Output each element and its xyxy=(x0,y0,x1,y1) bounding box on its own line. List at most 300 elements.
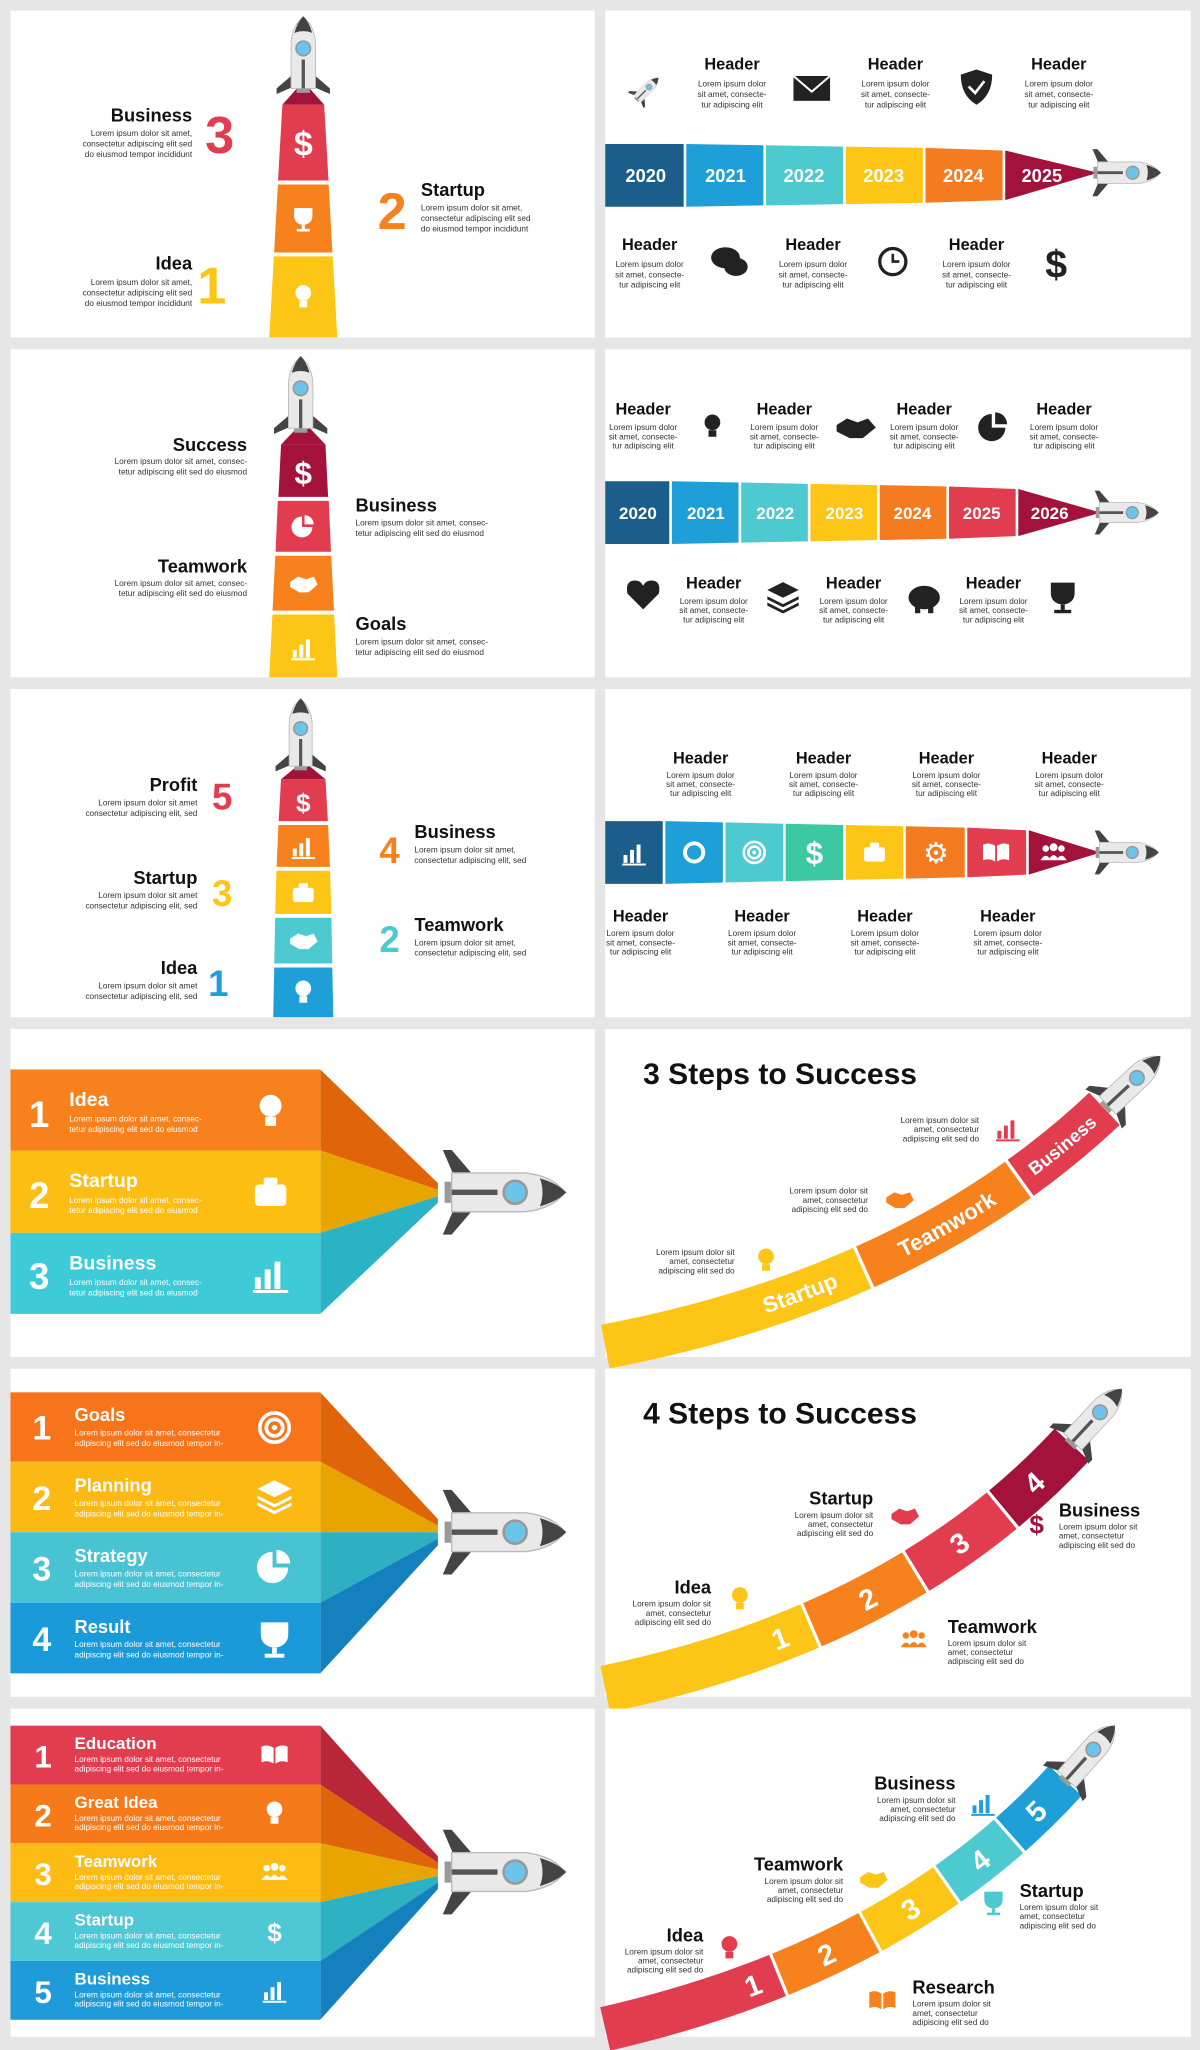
title: 3 Steps to Success xyxy=(643,1058,917,1091)
band 4 startup: adipiscing elit sed do eiusmod tempor in- xyxy=(75,1941,224,1950)
band 2 planning: adipiscing elit sed do eiusmod tempor in- xyxy=(75,1510,224,1519)
timeline bar: 2023 xyxy=(863,165,904,186)
headers: Lorem ipsum dolor xyxy=(728,929,796,938)
rocket xyxy=(1049,1371,1141,1464)
rocket bar: $ xyxy=(295,456,312,491)
callouts: Startup xyxy=(1020,1880,1084,1901)
callouts: amet, consectetur xyxy=(948,1648,1013,1657)
band 1 idea: Lorem ipsum dolor sit amet, consec- xyxy=(69,1115,202,1124)
band 2 planning: Planning xyxy=(75,1475,152,1496)
band 4 startup: Startup xyxy=(75,1911,134,1930)
text: idea: Idea xyxy=(156,252,193,273)
headers: tur adipiscing elit xyxy=(823,615,885,624)
timeline bar xyxy=(605,821,1101,884)
band 2 great idea: Great Idea xyxy=(75,1793,158,1812)
callouts: Lorem ipsum dolor sit xyxy=(656,1248,735,1257)
top headers: Header xyxy=(704,55,760,73)
band 2 startup: 2 xyxy=(29,1175,49,1216)
bottom headers: Lorem ipsum dolor xyxy=(616,260,684,269)
band 1 goals: adipiscing elit sed do eiusmod tempor in- xyxy=(75,1439,224,1448)
text: idea xyxy=(83,252,226,315)
headers: sit amet, consecte- xyxy=(679,606,748,615)
headers: Lorem ipsum dolor xyxy=(820,597,888,606)
callouts: amet, consectetur xyxy=(778,1886,843,1895)
headers: tur adipiscing elit xyxy=(683,615,745,624)
callouts: amet, consectetur xyxy=(808,1520,873,1529)
headers: Header xyxy=(757,401,813,419)
headers: Lorem ipsum dolor xyxy=(912,771,981,780)
curve xyxy=(605,1781,1065,2029)
text: startup: Startup xyxy=(421,179,485,200)
curve numbers: 2 xyxy=(818,1944,837,1967)
bottom headers: sit amet, consecte- xyxy=(615,270,684,279)
text blocks: Success xyxy=(173,434,247,455)
band 5 business: Business xyxy=(75,1969,150,1988)
fan xyxy=(320,1392,438,1673)
text blocks: Lorem ipsum dolor sit amet xyxy=(98,798,198,807)
headers: sit amet, consecte- xyxy=(973,938,1043,947)
band 5 business: adipiscing elit sed do eiusmod tempor in- xyxy=(75,2000,224,2009)
band 1 idea xyxy=(10,1069,320,1150)
headers: sit amet, consecte- xyxy=(606,938,675,947)
headers: sit amet, consecte- xyxy=(750,432,819,441)
top headers: tur adipiscing elit xyxy=(701,100,763,109)
band 4 startup xyxy=(10,1902,320,1961)
panel 9: 4 band rocket xyxy=(10,1369,595,1697)
headers: Lorem ipsum dolor xyxy=(890,423,958,432)
callouts: amet, consectetur xyxy=(669,1257,735,1266)
top headers: Lorem ipsum dolor xyxy=(861,79,930,88)
headers: Header xyxy=(686,574,742,592)
callouts: adipiscing elit sed do xyxy=(797,1529,874,1538)
timeline bar xyxy=(605,481,1101,544)
panel 3: rocket 4 stages xyxy=(10,349,595,677)
text: business xyxy=(83,105,234,165)
callouts: adipiscing elit sed do xyxy=(903,1134,980,1143)
callouts: adipiscing elit sed do xyxy=(912,2018,989,2027)
top headers: sit amet, consecte- xyxy=(861,90,930,99)
headers: Header xyxy=(613,908,669,926)
bottom headers: sit amet, consecte- xyxy=(779,270,848,279)
band 4 startup: $ xyxy=(267,1917,282,1947)
text blocks: Lorem ipsum dolor sit amet, consec- xyxy=(356,638,488,647)
curve numbers: 3 xyxy=(902,1899,920,1920)
bottom headers: Header xyxy=(949,236,1005,254)
band 3 teamwork xyxy=(10,1843,320,1902)
band 2 planning xyxy=(10,1462,320,1532)
timeline bar: 2022 xyxy=(756,504,794,523)
bottom headers: sit amet, consecte- xyxy=(942,270,1011,279)
rocket xyxy=(1092,149,1161,196)
band 2 startup: Lorem ipsum dolor sit amet, consec- xyxy=(69,1196,202,1205)
callouts: Business xyxy=(874,1773,956,1794)
headers: sit amet, consecte- xyxy=(959,606,1028,615)
callouts: Lorem ipsum dolor sit xyxy=(633,1600,712,1609)
headers: Lorem ipsum dolor xyxy=(667,771,735,780)
bottom headers: Header xyxy=(785,236,841,254)
top headers: Lorem ipsum dolor xyxy=(698,79,766,88)
curve numbers xyxy=(745,1800,1046,1997)
text blocks: 3 xyxy=(212,873,232,914)
band 3 strategy: adipiscing elit sed do eiusmod tempor in- xyxy=(75,1580,224,1589)
headers: Lorem ipsum dolor xyxy=(959,597,1028,606)
headers: Header xyxy=(673,750,729,768)
text blocks: consectetur adipiscing elit, sed xyxy=(414,856,527,865)
callouts: Lorem ipsum dolor sit xyxy=(625,1947,704,1956)
bottom headers: tur adipiscing elit xyxy=(946,281,1008,290)
text: startup: do eiusmod tempor incididunt xyxy=(421,225,529,234)
headers: tur adipiscing elit xyxy=(670,789,732,798)
headers: tur adipiscing elit xyxy=(963,615,1025,624)
timeline bar: 2025 xyxy=(1021,165,1062,186)
text blocks: Lorem ipsum dolor sit amet, consec- xyxy=(356,519,488,528)
text blocks: consectetur adipiscing elit, sed xyxy=(85,902,198,911)
text: startup: 2 xyxy=(378,183,407,241)
headers: sit amet, consecte- xyxy=(789,780,858,789)
band 3 teamwork: 3 xyxy=(34,1857,52,1892)
band 2 startup: Startup xyxy=(69,1170,138,1192)
text blocks: consectetur adipiscing elit, sed xyxy=(85,809,198,818)
panel 12: 5 steps xyxy=(600,1708,1191,2050)
headers: tur adipiscing elit xyxy=(1039,789,1101,798)
text blocks: Lorem ipsum dolor sit amet, consec- xyxy=(115,579,247,588)
panel 8: 3 steps to success xyxy=(601,1029,1191,1368)
headers: tur adipiscing elit xyxy=(894,442,956,451)
headers: Header xyxy=(1042,750,1098,768)
band 5 business: Lorem ipsum dolor sit amet, consectetur xyxy=(75,1991,221,2000)
callouts: Lorem ipsum dolor sit xyxy=(877,1796,956,1805)
callouts: Teamwork xyxy=(754,1854,844,1875)
headers: tur adipiscing elit xyxy=(854,947,916,956)
bottom icons xyxy=(711,243,1067,286)
band 1 goals xyxy=(10,1392,320,1462)
headers: sit amet, consecte- xyxy=(728,938,797,947)
band 1 goals: Goals xyxy=(75,1404,125,1425)
bottom headers: Lorem ipsum dolor xyxy=(779,260,847,269)
text blocks: 1 xyxy=(208,963,228,1004)
bottom headers: tur adipiscing elit xyxy=(782,281,844,290)
headers: sit amet, consecte- xyxy=(1035,780,1104,789)
text blocks: tetur adipiscing elit sed do eiusmod xyxy=(119,589,247,598)
callouts: Idea xyxy=(674,1577,712,1598)
text: business: do eiusmod tempor incididunt xyxy=(85,150,193,159)
headers: sit amet, consecte- xyxy=(890,432,959,441)
headers: tur adipiscing elit xyxy=(1033,442,1095,451)
panel 2: timeline 2020-2025 xyxy=(605,11,1191,337)
text: idea: Lorem ipsum dolor sit amet, xyxy=(91,278,192,287)
headers: sit amet, consecte- xyxy=(819,606,888,615)
bottom headers: tur adipiscing elit xyxy=(619,281,681,290)
band 1 education: Lorem ipsum dolor sit amet, consectetur xyxy=(75,1755,221,1764)
rocket xyxy=(1043,1708,1135,1801)
bottom icons: $ xyxy=(1045,243,1067,286)
rocket bar: $ xyxy=(296,788,311,818)
callouts xyxy=(633,1488,1140,1666)
rocket xyxy=(443,1490,566,1575)
callouts: Lorem ipsum dolor sit xyxy=(912,2000,992,2009)
callouts: amet, consectetur xyxy=(638,1957,704,1966)
text blocks: Teamwork xyxy=(158,556,248,577)
rocket xyxy=(274,356,327,434)
icons xyxy=(627,412,1075,613)
timeline bar: ⚙ xyxy=(923,838,949,870)
callouts: amet, consectetur xyxy=(1020,1912,1085,1921)
curve numbers: 1 xyxy=(745,1975,764,1997)
rocket xyxy=(443,1830,566,1914)
headers: sit amet, consecte- xyxy=(912,780,981,789)
rocket xyxy=(1095,830,1159,874)
band 2 great idea: 2 xyxy=(34,1798,52,1833)
callouts: adipiscing elit sed do xyxy=(1059,1541,1136,1550)
callouts: amet, consectetur xyxy=(1059,1532,1124,1541)
headers: Header xyxy=(919,750,975,768)
top headers: sit amet, consecte- xyxy=(698,90,767,99)
timeline bar: 2022 xyxy=(784,165,824,186)
headers: Lorem ipsum dolor xyxy=(789,771,858,780)
text blocks: 5 xyxy=(212,776,232,817)
text blocks: Lorem ipsum dolor sit amet, xyxy=(414,938,516,947)
curve numbers: 2 xyxy=(859,1589,878,1611)
text blocks: consectetur adipiscing elit, sed xyxy=(85,992,198,1001)
text: idea: consectetur adipiscing elit sed xyxy=(83,289,193,298)
text blocks: Profit xyxy=(150,774,197,795)
text blocks: Idea xyxy=(161,957,198,978)
timeline bar xyxy=(605,144,1098,207)
headers: Header xyxy=(966,574,1022,592)
headers: Lorem ipsum dolor xyxy=(851,929,919,938)
band 3 teamwork: adipiscing elit sed do eiusmod tempor in- xyxy=(75,1882,224,1891)
band 2 great idea: adipiscing elit sed do eiusmod tempor in- xyxy=(75,1823,224,1832)
text: business: 3 xyxy=(205,107,234,165)
panel 11: 5 band rocket xyxy=(10,1709,595,2037)
headers: Header xyxy=(796,750,852,768)
timeline bar: 2020 xyxy=(619,504,657,523)
band 2 great idea xyxy=(10,1784,320,1843)
callouts: adipiscing elit sed do xyxy=(627,1966,704,1975)
band 3 strategy xyxy=(10,1532,320,1603)
band 3 business: 3 xyxy=(29,1256,49,1297)
band 4 result xyxy=(10,1603,320,1673)
headers: Lorem ipsum dolor xyxy=(609,423,677,432)
panel 6: icon timeline xyxy=(605,689,1191,1017)
band 2 great idea: Lorem ipsum dolor sit amet, consectetur xyxy=(75,1814,221,1823)
callouts: Teamwork xyxy=(948,1616,1038,1637)
callouts: adipiscing elit sed do xyxy=(635,1618,712,1627)
fan xyxy=(320,1069,438,1314)
callouts: Lorem ipsum dolor sit xyxy=(765,1877,844,1886)
callouts: Lorem ipsum dolor sit xyxy=(1020,1903,1099,1912)
rocket bar xyxy=(269,421,337,677)
callouts: amet, consectetur xyxy=(890,1805,956,1814)
band 2 planning: 2 xyxy=(32,1480,51,1518)
panel 1: rocket 3 stages xyxy=(10,11,595,337)
callouts: $ xyxy=(1029,1509,1044,1539)
headers: Lorem ipsum dolor xyxy=(1030,423,1098,432)
band 3 teamwork: Lorem ipsum dolor sit amet, consectetur xyxy=(75,1873,221,1882)
rocket bar xyxy=(273,761,333,1017)
headers: Lorem ipsum dolor xyxy=(974,929,1042,938)
rocket xyxy=(277,16,330,94)
callouts: Idea xyxy=(667,1924,704,1945)
curve numbers: 4 xyxy=(1028,1472,1045,1492)
text blocks: Lorem ipsum dolor sit amet, xyxy=(414,845,516,854)
curve labels: Teamwork xyxy=(896,1194,998,1256)
callouts: Lorem ipsum dolor sit xyxy=(795,1511,874,1520)
band 1 education: Education xyxy=(75,1734,157,1753)
headers: tur adipiscing elit xyxy=(731,947,793,956)
headers: tur adipiscing elit xyxy=(977,947,1039,956)
rocket bar: $ xyxy=(294,126,313,164)
band 4 result: 4 xyxy=(32,1621,51,1659)
headers: Header xyxy=(1036,401,1092,419)
top headers: Header xyxy=(868,55,924,73)
callouts: amet, consectetur xyxy=(646,1609,711,1618)
fan xyxy=(320,1726,438,2020)
timeline bar: 2024 xyxy=(943,165,985,186)
callouts: adipiscing elit sed do xyxy=(879,1814,956,1823)
callouts: Lorem ipsum dolor sit xyxy=(789,1187,869,1196)
band 3 business: Business xyxy=(69,1252,157,1274)
text blocks: consectetur adipiscing elit, sed xyxy=(414,949,527,958)
headers xyxy=(609,401,1099,624)
timeline bar: 2021 xyxy=(705,165,746,186)
band 3 strategy: Strategy xyxy=(75,1545,149,1566)
band 1 idea: tetur adipiscing elit sed do eiusmod xyxy=(69,1125,198,1134)
text blocks: Business xyxy=(414,821,496,842)
headers: Lorem ipsum dolor xyxy=(1035,771,1104,780)
band 4 result: adipiscing elit sed do eiusmod tempor in- xyxy=(75,1651,224,1660)
text: startup: Lorem ipsum dolor sit amet, xyxy=(421,204,522,213)
text blocks xyxy=(85,774,527,1004)
top headers: sit amet, consecte- xyxy=(1024,90,1094,99)
callouts: amet, consectetur xyxy=(914,1125,979,1134)
text: business: Business xyxy=(111,105,192,126)
headers: Lorem ipsum dolor xyxy=(750,423,819,432)
panel 10: 4 steps to success xyxy=(600,1368,1191,1709)
headers: sit amet, consecte- xyxy=(1030,432,1099,441)
text blocks: 4 xyxy=(379,830,400,871)
band 1 goals: Lorem ipsum dolor sit amet, consectetur xyxy=(75,1428,221,1437)
text blocks: tetur adipiscing elit sed do eiusmod xyxy=(356,529,484,538)
curve numbers: 5 xyxy=(1025,1800,1046,1822)
curve numbers: 1 xyxy=(772,1628,790,1650)
band 3 teamwork: Teamwork xyxy=(75,1852,158,1871)
curve labels: Startup xyxy=(763,1277,837,1312)
headers xyxy=(606,750,1104,956)
text blocks: Startup xyxy=(133,867,197,888)
title: 4 Steps to Success xyxy=(643,1398,917,1431)
band 1 education: 1 xyxy=(34,1739,52,1774)
callouts: Research xyxy=(912,1977,995,1998)
band 4 startup: 4 xyxy=(34,1916,52,1951)
band 5 business xyxy=(10,1961,320,2020)
text: idea: do eiusmod tempor incididunt xyxy=(85,299,193,308)
band 1 idea: 1 xyxy=(29,1094,49,1135)
top icons xyxy=(628,69,992,108)
text blocks: Lorem ipsum dolor sit amet xyxy=(98,891,198,900)
band 4 result: Lorem ipsum dolor sit amet, consectetur xyxy=(75,1640,221,1649)
callouts: amet, consectetur xyxy=(803,1196,868,1205)
headers: tur adipiscing elit xyxy=(613,442,674,451)
timeline bar: 2026 xyxy=(1031,504,1069,523)
band 2 startup: tetur adipiscing elit sed do eiusmod xyxy=(69,1206,198,1215)
band 2 planning: Lorem ipsum dolor sit amet, consectetur xyxy=(75,1499,221,1508)
band 2 startup xyxy=(10,1150,320,1233)
text blocks: Lorem ipsum dolor sit amet, consec- xyxy=(115,457,247,466)
curve numbers: 4 xyxy=(974,1850,990,1870)
timeline bar: 2020 xyxy=(625,165,666,186)
headers: Lorem ipsum dolor xyxy=(680,597,748,606)
headers: Header xyxy=(615,401,671,419)
headers: sit amet, consecte- xyxy=(609,432,678,441)
headers: Header xyxy=(734,908,790,926)
headers: Lorem ipsum dolor xyxy=(606,929,675,938)
curve labels: Business xyxy=(1028,1118,1096,1176)
headers: tur adipiscing elit xyxy=(610,947,672,956)
rocket xyxy=(1085,1036,1179,1129)
headers: Header xyxy=(826,574,882,592)
panel 4: timeline 2020-2026 xyxy=(605,349,1191,677)
text blocks: Business xyxy=(356,494,437,515)
band 3 strategy: Lorem ipsum dolor sit amet, consectetur xyxy=(75,1570,221,1579)
text: idea: 1 xyxy=(197,257,226,315)
callouts: adipiscing elit sed do xyxy=(767,1895,844,1904)
headers: tur adipiscing elit xyxy=(754,442,816,451)
text blocks xyxy=(115,434,488,657)
timeline bar: 2025 xyxy=(963,504,1001,523)
callouts xyxy=(656,1116,1020,1275)
text blocks: tetur adipiscing elit sed do eiusmod xyxy=(356,648,484,657)
callouts: Lorem ipsum dolor sit xyxy=(948,1639,1027,1648)
callouts: adipiscing elit sed do xyxy=(1020,1921,1096,1930)
timeline bar: 2021 xyxy=(687,504,725,523)
band 4 startup: Lorem ipsum dolor sit amet, consectetur xyxy=(75,1932,221,1941)
curve xyxy=(605,1445,1072,1689)
text: startup xyxy=(378,179,531,241)
band 3 business: tetur adipiscing elit sed do eiusmod xyxy=(69,1289,198,1298)
band 4 result: Result xyxy=(75,1616,130,1637)
callouts: Startup xyxy=(809,1488,873,1509)
text blocks: Lorem ipsum dolor sit amet xyxy=(98,981,198,990)
top headers: tur adipiscing elit xyxy=(865,100,927,109)
callouts: Business xyxy=(1059,1500,1140,1521)
text blocks: tetur adipiscing elit sed do eiusmod xyxy=(119,468,247,477)
text blocks: 2 xyxy=(379,919,400,960)
callouts: adipiscing elit sed do xyxy=(948,1657,1024,1666)
text blocks: Goals xyxy=(356,613,406,634)
headers: Header xyxy=(857,908,913,926)
rocket xyxy=(443,1150,566,1235)
text blocks: Teamwork xyxy=(414,914,504,935)
headers: sit amet, consecte- xyxy=(850,938,920,947)
top headers xyxy=(698,55,1094,109)
timeline bar: 2024 xyxy=(894,504,932,523)
headers: tur adipiscing elit xyxy=(916,789,978,798)
top headers: tur adipiscing elit xyxy=(1028,100,1090,109)
band 1 education: adipiscing elit sed do eiusmod tempor in- xyxy=(75,1764,224,1773)
bottom headers: Lorem ipsum dolor xyxy=(942,260,1011,269)
band 1 education xyxy=(10,1726,320,1784)
callouts: adipiscing elit sed do xyxy=(658,1266,735,1275)
callouts: adipiscing elit sed do xyxy=(792,1205,868,1214)
band 3 business: Lorem ipsum dolor sit amet, consec- xyxy=(69,1278,202,1287)
curve numbers xyxy=(772,1472,1045,1650)
rocket bar xyxy=(269,81,337,337)
band 1 goals: 1 xyxy=(32,1409,51,1447)
rocket xyxy=(276,698,326,771)
text: business: consectetur adipiscing elit sed xyxy=(83,140,193,149)
band 3 strategy: 3 xyxy=(32,1551,51,1589)
